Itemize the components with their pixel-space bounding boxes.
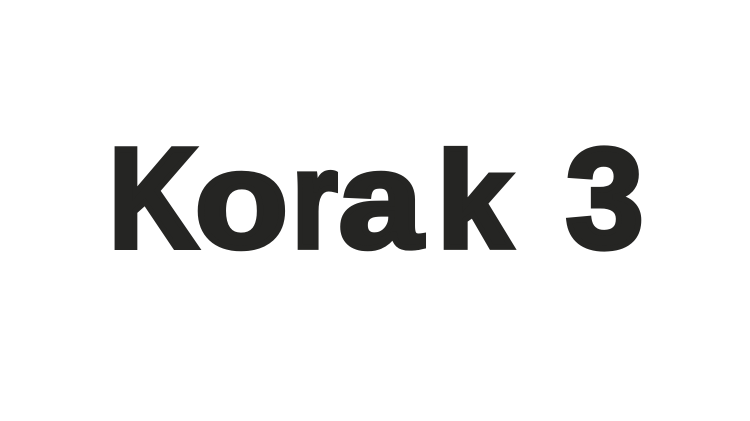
title: Korak 3: o	[195, 123, 288, 276]
title: Korak 3: 3	[566, 119, 643, 277]
title: Korak 3: a	[339, 125, 424, 277]
title: Korak 3: k	[437, 124, 512, 276]
title: Korak 3: r	[292, 124, 337, 277]
title: Korak 3	[109, 119, 643, 278]
title: Korak 3: K	[109, 119, 197, 278]
